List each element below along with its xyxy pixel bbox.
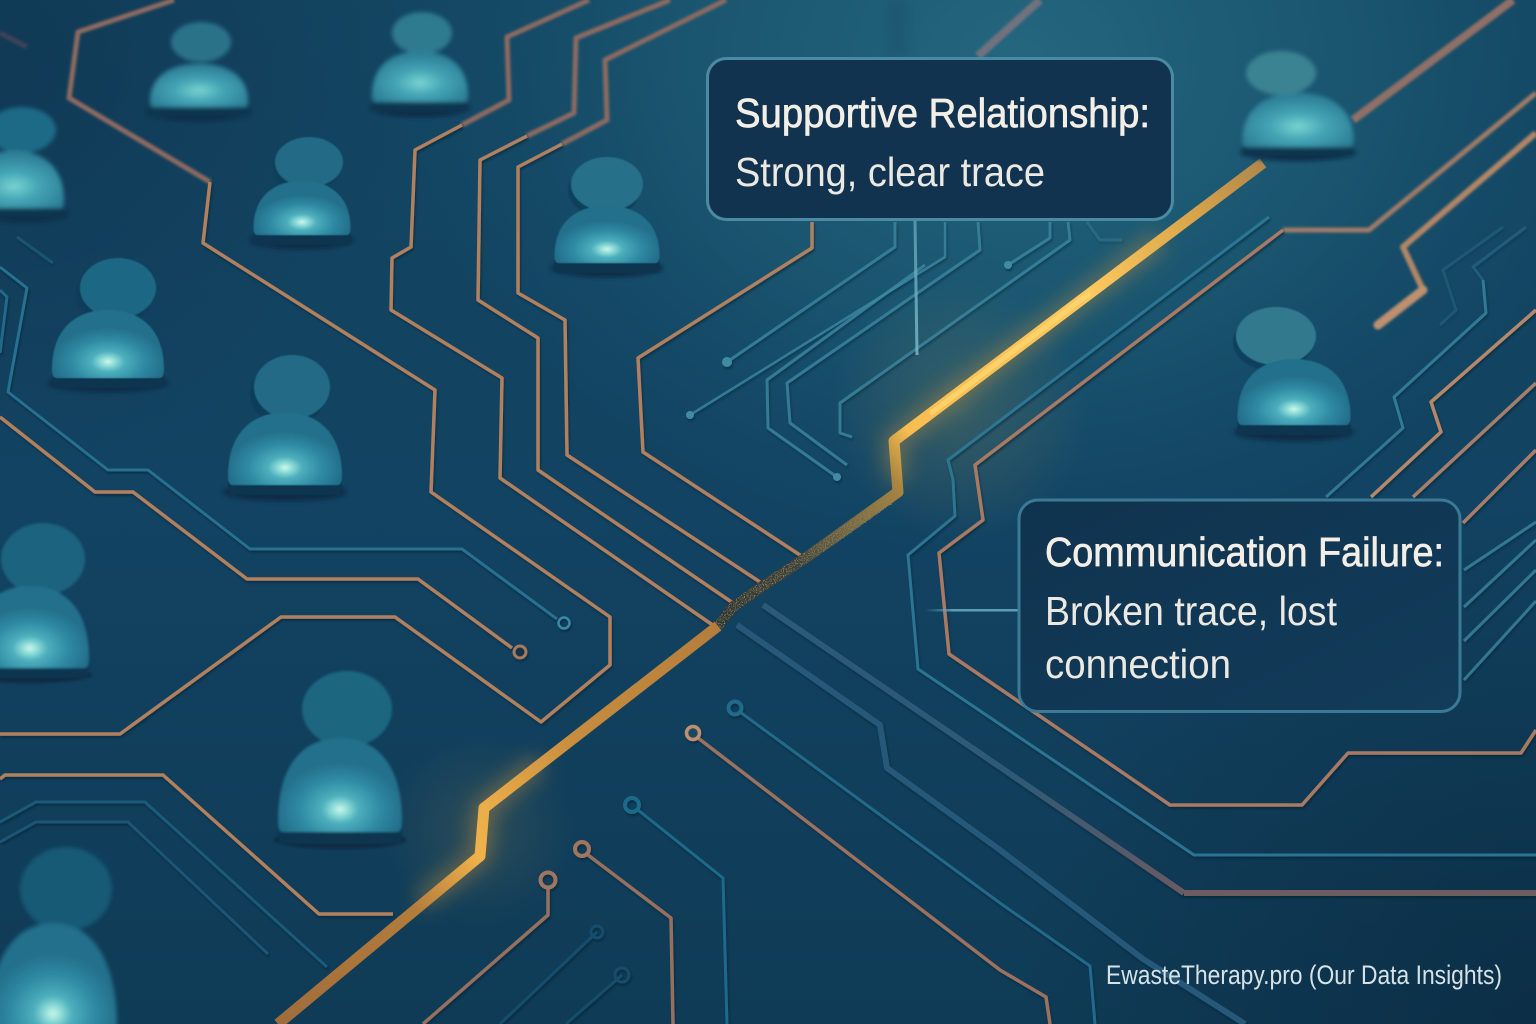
- disconnected dark traces past the break: [737, 605, 1245, 1024]
- person icon 4: [0, 107, 68, 222]
- person icon 6: [48, 258, 168, 392]
- gold glow: [420, 240, 1160, 902]
- person icon 11: [1240, 51, 1356, 161]
- callout: communication failure: [1019, 500, 1460, 712]
- person icon 5: [551, 157, 663, 277]
- person icon 7: [223, 355, 347, 501]
- copper traces, blurred far segments: [0, 0, 1536, 325]
- faint teal traces: [686, 217, 1536, 855]
- person icon 2: [370, 12, 470, 117]
- left and bottom blue traces: [0, 237, 1095, 1024]
- person icon 9: [274, 671, 406, 849]
- person icon 10: [0, 847, 117, 1024]
- callout: supportive relationship: [708, 58, 1172, 220]
- callout text line two: connection: [1045, 641, 1231, 687]
- person icon 1: [147, 22, 251, 121]
- leader line: supportive relationship callout: [915, 220, 917, 355]
- person icon 8: [0, 523, 92, 683]
- speckled broken section: [718, 500, 890, 626]
- gold trace: supportive connection and break: [278, 163, 1263, 1024]
- person icon 12: [1233, 307, 1354, 441]
- core highlight: [930, 293, 1090, 414]
- upper gold trace fading into the break: [718, 163, 1263, 626]
- callout heading: Supportive Relationship:: [735, 90, 1150, 136]
- person icon 3: [250, 137, 354, 249]
- callout box: [708, 58, 1172, 220]
- callout text line one: Broken trace, lost: [1045, 588, 1338, 634]
- leader line: communication failure callout: [925, 609, 1019, 612]
- callout heading: Communication Failure:: [1045, 529, 1444, 575]
- lower gold trace: [278, 626, 718, 1024]
- callout text: Strong, clear trace: [735, 149, 1045, 195]
- callout box: [1019, 500, 1460, 712]
